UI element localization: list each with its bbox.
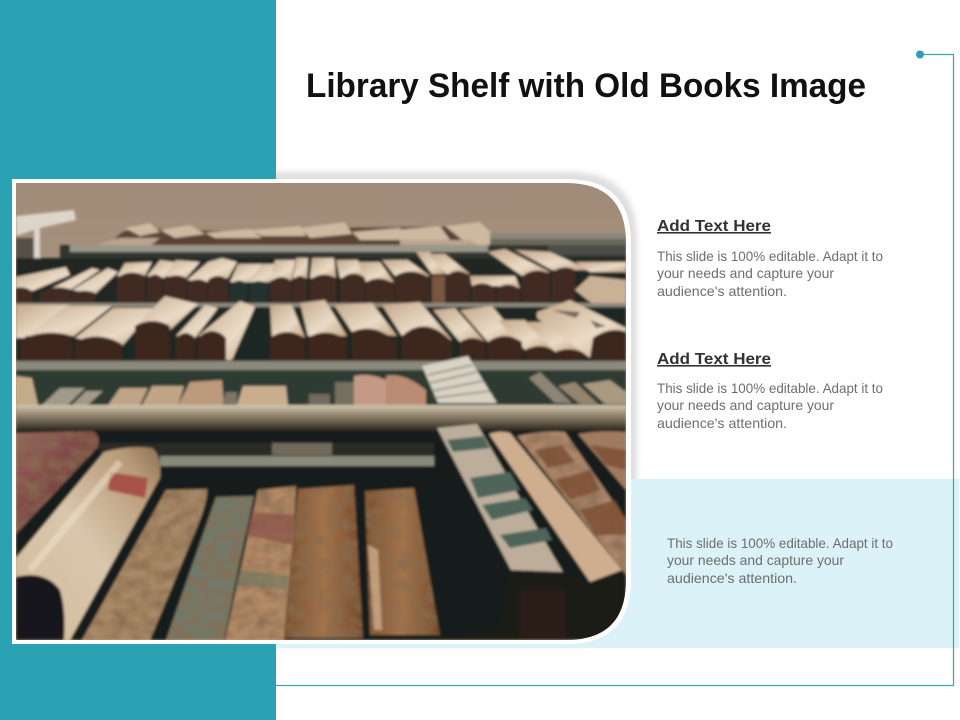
narrower brown book (365, 488, 440, 635)
striped green book (437, 424, 564, 574)
body 2: audience's attention. (657, 415, 787, 431)
lower dark shelf (16, 428, 626, 640)
body 2: your needs and capture your (657, 397, 834, 413)
frame shadow (6, 172, 637, 646)
heading 1: Add Text Here (657, 218, 771, 235)
right stacked book (574, 274, 626, 305)
heading 2: Add Text Here (657, 351, 771, 368)
body 1 (657, 248, 883, 299)
text block 2 (657, 351, 883, 431)
photo: library shelf with old books (16, 183, 626, 640)
second row books (16, 249, 626, 294)
lower back shelf (100, 443, 434, 466)
body 1: This slide is 100% editable. Adapt it to (657, 248, 883, 264)
banded spine book (225, 486, 296, 640)
band text (667, 535, 893, 586)
top row of books (90, 222, 505, 246)
body 1: audience's attention. (657, 283, 787, 299)
second shelf rail (16, 303, 626, 307)
second row background (16, 258, 626, 304)
band text: your needs and capture your (667, 552, 844, 568)
text block 1 (657, 218, 883, 299)
dark-green book ends (230, 280, 268, 304)
third row books (16, 296, 626, 362)
foreground rail (16, 405, 626, 431)
image frame (12, 179, 631, 644)
wide brown book (285, 485, 363, 638)
body 1: your needs and capture your (657, 265, 834, 281)
cream thin book (489, 432, 622, 582)
band text: audience's attention. (667, 570, 797, 586)
second row book ends (16, 267, 575, 304)
ribbed brown books (517, 431, 626, 575)
red book (16, 431, 99, 534)
teal side panel (0, 0, 276, 720)
dark book ends (509, 568, 625, 576)
body 2 (657, 380, 883, 431)
fourth row books (16, 356, 626, 405)
brown tooled book (82, 489, 207, 640)
blue-green book (166, 496, 254, 640)
band text: This slide is 100% editable. Adapt it to (667, 535, 893, 551)
cream book with red label (16, 447, 160, 640)
connector line with dot (276, 50, 954, 686)
title: Library Shelf with Old Books Image (306, 67, 866, 105)
light blue band (276, 479, 959, 648)
shelf unit top left (16, 210, 76, 262)
third shelf rail (16, 361, 626, 406)
body 2: This slide is 100% editable. Adapt it to (657, 380, 883, 396)
tan book end (432, 276, 445, 304)
top shelf rail (60, 233, 626, 259)
